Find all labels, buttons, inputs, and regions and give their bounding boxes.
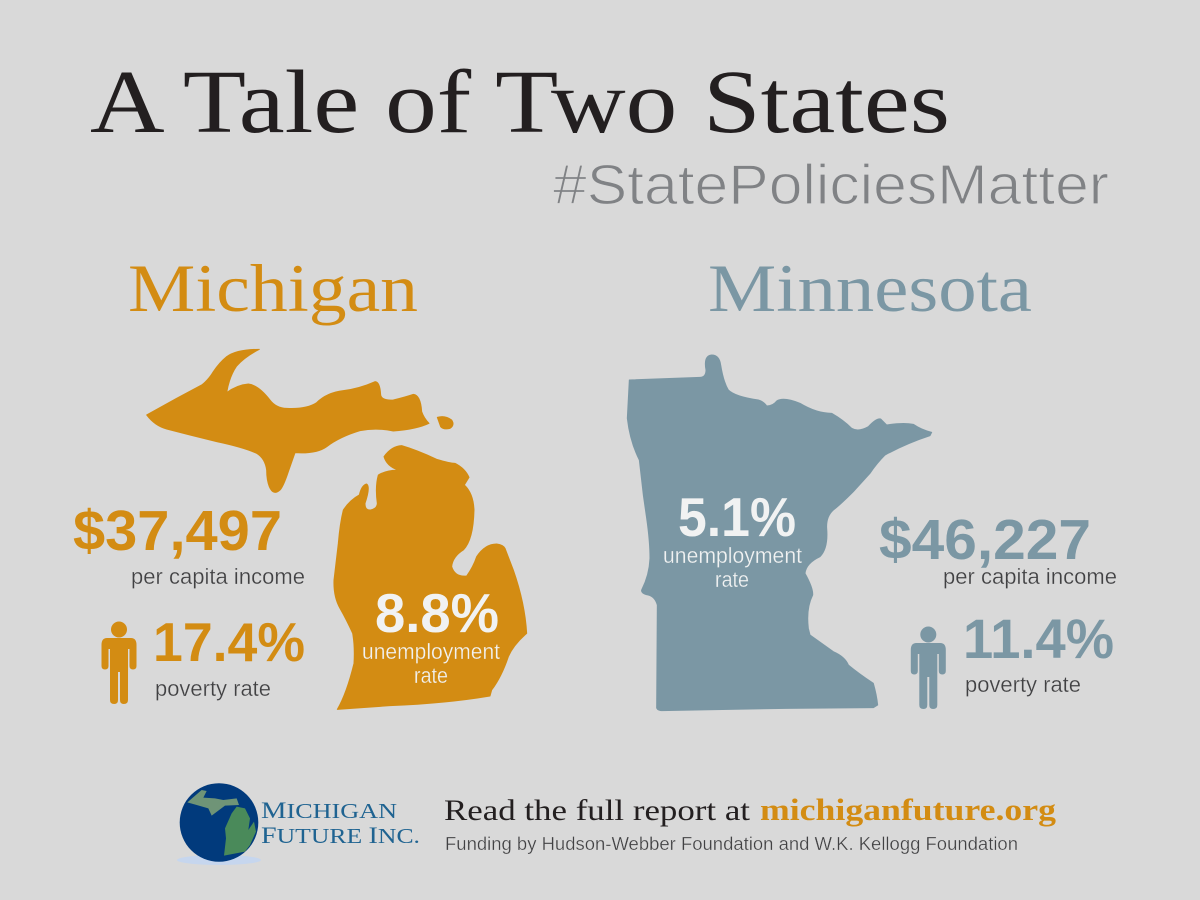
icon: person Minnesota — [911, 626, 946, 709]
subtitle hashtag: #StatePoliciesMatter — [553, 153, 1109, 217]
stat: Michigan unemployment: rate — [414, 663, 448, 688]
stat: Michigan poverty rate: 17.4% — [153, 611, 305, 673]
funding credit: Funding by Hudson-Webber Foundation and W.K. Kellogg Foundation — [445, 834, 1018, 854]
stat: Minnesota unemployment: rate — [715, 567, 749, 592]
stat: Minnesota per capita income: per capita income — [943, 564, 1117, 589]
logo: Michigan Future Inc.: MICHIGAN — [261, 798, 397, 823]
stat: Minnesota poverty rate — [963, 607, 1114, 697]
stat: Michigan unemployment — [362, 582, 500, 688]
call to action — [444, 792, 1057, 827]
stat: Michigan per capita income — [73, 499, 305, 589]
stat: Michigan per capita income: per capita income — [131, 564, 305, 589]
icon: person Michigan — [102, 622, 136, 704]
logo: Michigan Future Inc. — [177, 783, 420, 865]
map: Michigan — [147, 349, 527, 709]
heading: Minnesota: Minnesota — [708, 250, 1032, 326]
stat: Minnesota unemployment: unemployment — [663, 543, 802, 568]
stat: Michigan per capita income: $37,497 — [73, 499, 282, 563]
call to action: Read the full report at — [444, 794, 751, 827]
stat: Michigan unemployment: unemployment — [362, 639, 500, 664]
stat: Minnesota unemployment: 5.1% — [678, 486, 796, 548]
stat: Minnesota unemployment — [663, 486, 802, 592]
stat: Minnesota per capita income — [879, 508, 1117, 589]
stat: Michigan unemployment: 8.8% — [375, 582, 499, 644]
logo: Michigan Future Inc.: FUTURE INC. — [261, 823, 420, 848]
stat: Minnesota per capita income: $46,227 — [879, 508, 1091, 572]
stat: Michigan poverty rate: poverty rate — [155, 676, 271, 701]
title: A Tale of Two States — [90, 53, 950, 152]
map: Minnesota — [627, 355, 932, 711]
call to action: michiganfuture.org — [760, 792, 1057, 827]
stat: Michigan poverty rate — [153, 611, 305, 701]
stat: Minnesota poverty rate: 11.4% — [963, 607, 1114, 670]
stat: Minnesota poverty rate: poverty rate — [965, 672, 1081, 697]
heading: Michigan: Michigan — [128, 250, 418, 326]
